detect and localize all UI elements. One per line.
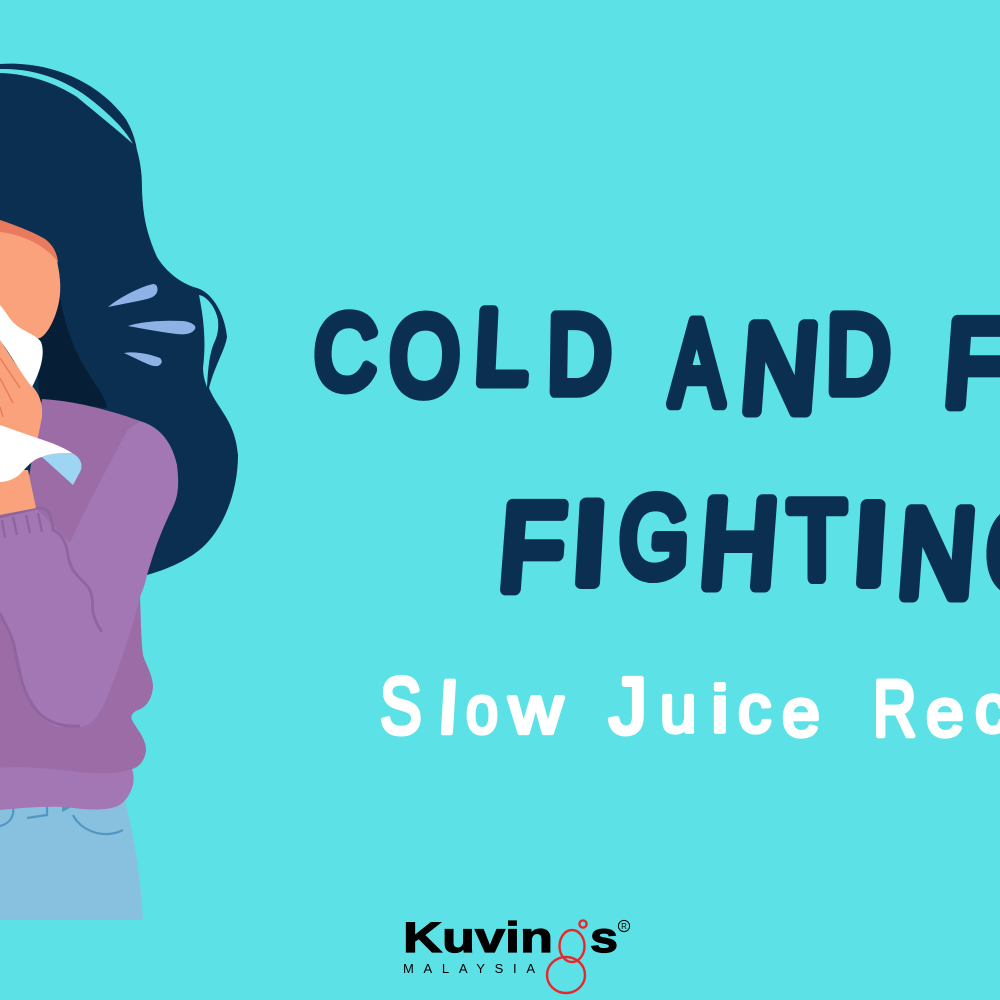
- subtitle: Slow Juice Recipes: o: [466, 673, 498, 748]
- subtitle: Slow Juice Recipes: c: [738, 671, 771, 747]
- title line 1: COLD AND FLU: O: [388, 295, 461, 418]
- sneeze droplets: [108, 284, 195, 366]
- Malaysia label: MALAYSIA: [403, 961, 535, 976]
- title line 1: COLD AND FLU: D: [826, 294, 891, 416]
- tissue over nose: [0, 305, 43, 387]
- subtitle: Slow Juice Recipes: e: [782, 675, 820, 751]
- logo: Kuvings Malaysia: [403, 914, 630, 993]
- subtitle: Slow Juice Recipes: e: [926, 675, 964, 751]
- subtitle: Slow Juice Recipes: J: [609, 660, 647, 750]
- title line 1: COLD AND FLU: L: [472, 289, 531, 406]
- jeans: [0, 800, 143, 920]
- tissue in hand: [0, 425, 82, 485]
- title line 2: FIGHTING: G: [617, 474, 692, 600]
- title line 2: FIGHTING: H: [696, 475, 782, 613]
- subtitle: Slow Juice Recipes: w: [508, 672, 563, 748]
- subtitle: Slow Juice Recipes: S: [380, 662, 422, 751]
- title line 1: COLD AND FLU: C: [312, 294, 379, 411]
- title line 2: FIGHTING: F: [495, 480, 569, 616]
- illustration: woman sneezing into tissue: [0, 64, 238, 920]
- title line 2: FIGHTING: I: [569, 479, 611, 608]
- title line 2: FIGHTING: [495, 474, 1000, 623]
- registered mark: [618, 920, 630, 932]
- registered mark: R: [621, 922, 627, 931]
- title line 1: COLD AND FLU: D: [547, 294, 612, 416]
- face: [0, 220, 60, 345]
- wrist: [0, 470, 36, 515]
- wordmark: s: [590, 914, 618, 962]
- title line 2: FIGHTING: N: [894, 485, 980, 623]
- subtitle: Slow Juice Recipes: i: [711, 673, 729, 746]
- subtitle: Slow Juice Recipes: R: [873, 664, 916, 753]
- sweater: [0, 399, 178, 810]
- red g mark: [547, 920, 587, 993]
- title line 2: FIGHTING: T: [788, 478, 846, 602]
- subtitle: Slow Juice Recipes: u: [660, 672, 696, 747]
- hair: [0, 64, 238, 575]
- wordmark: Kuvin: [403, 914, 553, 962]
- title line 1: COLD AND FLU: A: [670, 296, 723, 430]
- wordmark: [403, 914, 618, 962]
- title line 1: COLD AND FLU: N: [737, 300, 823, 438]
- title line 1: COLD AND FLU: [312, 289, 1000, 438]
- neck shadow: [35, 297, 107, 408]
- title line 2: FIGHTING: I: [850, 481, 892, 608]
- subtitle: Slow Juice Recipes: l: [437, 669, 460, 749]
- hand: [0, 340, 42, 442]
- subtitle: Slow Juice Recipes: [380, 660, 1000, 753]
